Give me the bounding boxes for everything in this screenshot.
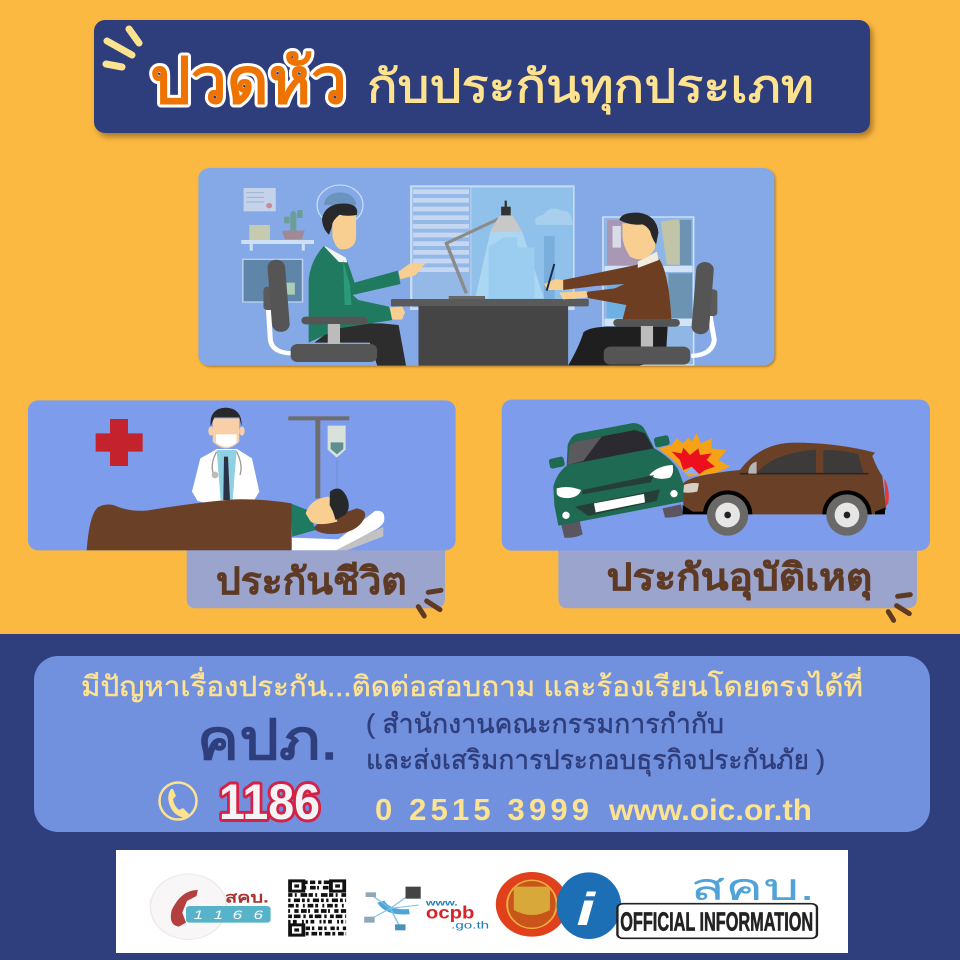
logo: 1166 hotline: [150, 874, 271, 939]
icon: spark: [888, 595, 910, 620]
hotline number: 1186: [219, 774, 320, 830]
logo: ocpb: www.: [425, 898, 458, 908]
logo strip: [116, 850, 848, 953]
icon: explosion: [658, 433, 730, 477]
icon: red cross: [96, 419, 143, 466]
man right: [544, 213, 717, 366]
panel: life insurance: [28, 400, 456, 616]
phone number: 0 2515 3999: [375, 792, 589, 827]
window: [410, 185, 575, 310]
logo: info: [557, 872, 621, 939]
logo: 1166 hotline: 1: [214, 909, 223, 922]
logo: official information: สคบ.: [691, 866, 815, 908]
label tab: [187, 548, 445, 608]
label text: ประกันชีวิต: [216, 560, 407, 602]
logo: ocpb: ocpb: [426, 902, 474, 922]
agency name: ( สำนักงานคณะกรรมการกำกับ: [366, 709, 724, 739]
contact panel: [34, 656, 930, 832]
patient bed: [87, 488, 384, 550]
agency abbreviation: คปภ.: [197, 708, 338, 771]
label tab: [558, 548, 917, 608]
icon: spark: [418, 590, 441, 616]
brown car: [683, 443, 889, 536]
logo: official information: [617, 866, 817, 938]
logo: 1166 hotline: สคบ.: [225, 889, 269, 906]
logo: seal: [496, 872, 568, 937]
agency name: [366, 709, 825, 777]
doctor: [192, 408, 259, 505]
icon: title spark: [106, 29, 139, 67]
contact heading: มีปัญหาเรื่องประกัน...ติดต่อสอบถาม และร้องเรียนโดยตรงได้ที่: [81, 667, 863, 702]
label text: ประกันอุบัติเหตุ: [607, 556, 872, 600]
desk lamp: [446, 201, 522, 299]
logo: 1166 hotline: 1: [194, 909, 203, 922]
title bar: [94, 20, 870, 133]
icon: phone: [160, 782, 196, 820]
title highlight: ปวดหัว: [150, 45, 347, 117]
bookshelf: [603, 217, 694, 365]
website: www.oic.or.th: [608, 794, 812, 827]
agency name: และส่งเสริมการประกอบธุรกิจประกันภัย ): [366, 745, 825, 777]
iv stand: [288, 416, 349, 498]
logo: 1166 hotline: 6: [253, 909, 264, 922]
green car: [548, 423, 684, 538]
footer band: [0, 634, 960, 960]
panel: office meeting illustration: [198, 168, 774, 367]
desk: [391, 299, 589, 367]
logo: ocpb: .go.th: [451, 919, 489, 931]
qr code: [288, 879, 346, 937]
panel: accident insurance: [502, 400, 930, 620]
man left: [263, 204, 425, 367]
logo: 1166 hotline: 6: [233, 909, 243, 922]
logo: info: i: [577, 884, 596, 936]
wall decor: [241, 185, 363, 302]
title text: กับประกันทุกประเภท: [367, 60, 814, 115]
logo: ocpb: [364, 887, 489, 931]
